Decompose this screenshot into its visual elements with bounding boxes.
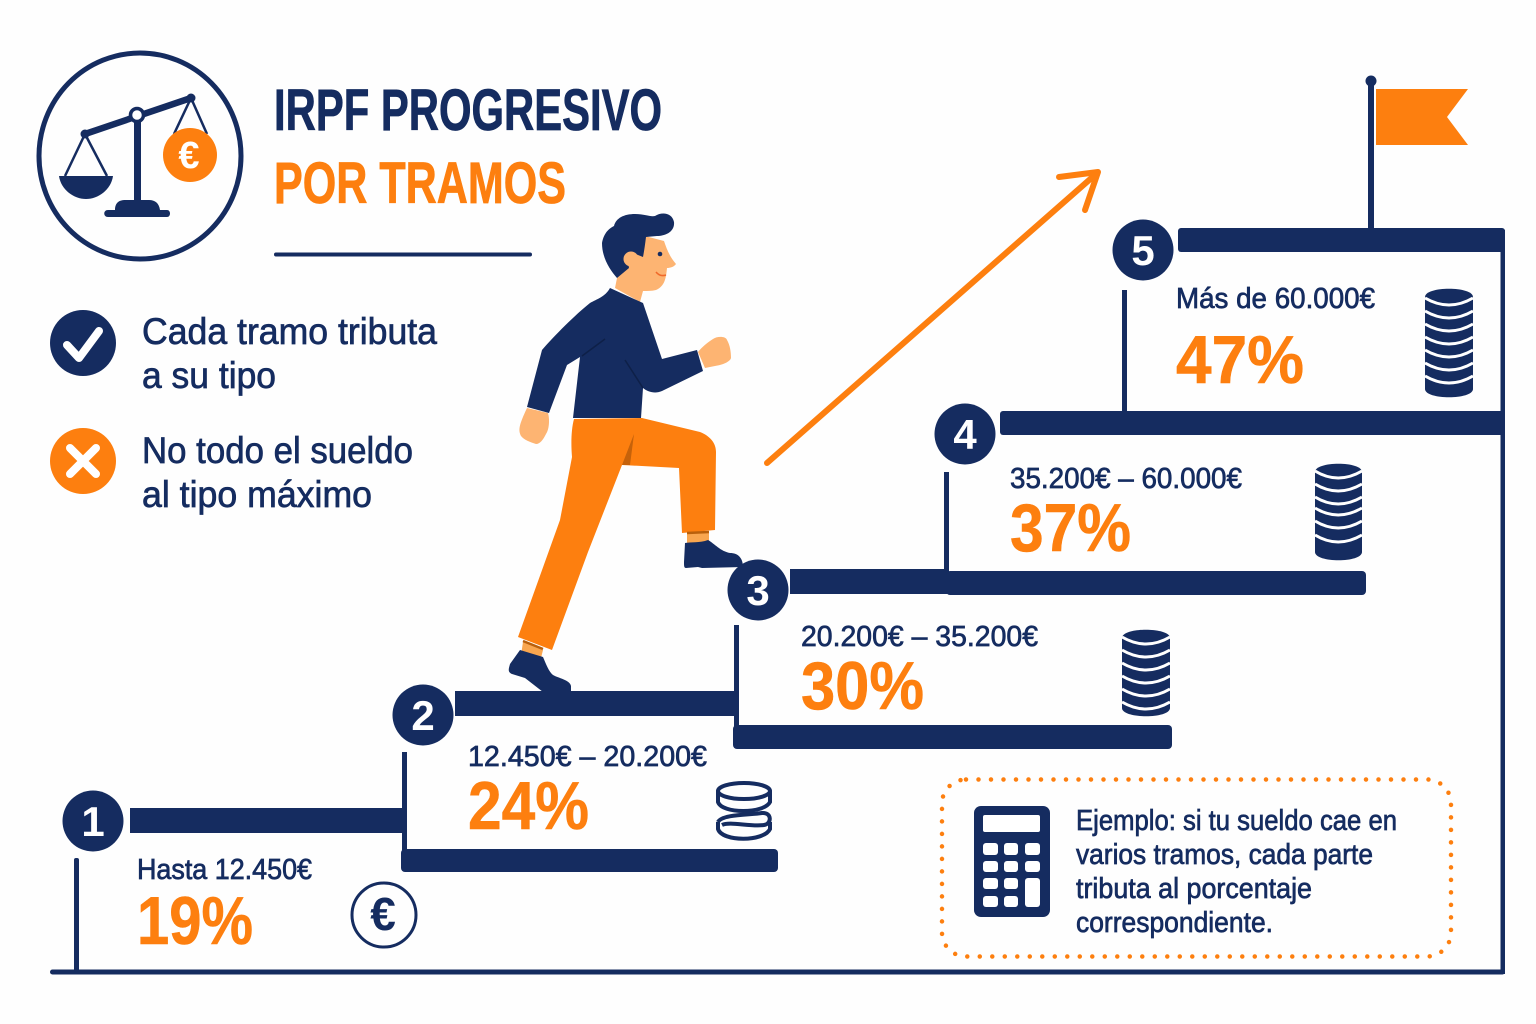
icon: coin stack	[1122, 630, 1170, 716]
step 1: 19%	[137, 883, 253, 959]
callout text	[1076, 805, 1397, 939]
bullet: not all salary at the top rate: No todo el sueldo	[142, 430, 413, 471]
eye and smile	[658, 252, 662, 256]
bullet: not all salary at the top rate	[50, 428, 413, 515]
arrow: upward progression	[767, 172, 1098, 463]
callout text: varios tramos, cada parte	[1076, 839, 1373, 871]
callout text: correspondiente.	[1076, 907, 1273, 939]
icon: coin stack	[1315, 464, 1362, 560]
back ankle	[521, 642, 543, 658]
step 2: 24%	[468, 768, 589, 844]
icon: goal flag	[1366, 76, 1468, 230]
bullet: each bracket taxed at its rate	[50, 310, 437, 396]
icon: coin stack	[1425, 289, 1473, 397]
step 5: 47%	[1176, 322, 1304, 398]
icon: scale with euro coin	[39, 53, 241, 259]
step 3: 3	[746, 567, 770, 614]
trousers	[518, 418, 716, 650]
front fist	[698, 337, 731, 368]
bullet: not all salary at the top rate: al tipo máximo	[142, 474, 372, 515]
icon: coin pair	[718, 783, 770, 839]
step 4: 37%	[1010, 490, 1131, 566]
step 2: 2	[411, 692, 435, 739]
step 3	[728, 560, 1170, 724]
hair	[602, 214, 674, 278]
step 1: Hasta 12.450€	[137, 854, 312, 886]
icon: euro coin	[352, 883, 416, 947]
step 3: 30%	[801, 648, 924, 724]
title divider	[274, 252, 532, 256]
staircase frame	[50, 228, 1505, 974]
front ankle	[687, 531, 709, 544]
step 2: 12.450€ – 20.200€	[468, 741, 707, 773]
title	[274, 78, 662, 216]
front shoe	[684, 540, 743, 568]
step 2	[392, 684, 770, 844]
callout: example	[942, 780, 1451, 956]
callout text: Ejemplo: si tu sueldo cae en	[1076, 805, 1397, 837]
icon: scale with euro coin: €	[178, 135, 200, 177]
step 1	[62, 790, 416, 959]
title: POR TRAMOS	[274, 151, 566, 216]
shirt	[527, 288, 703, 418]
neck and face	[615, 236, 676, 302]
figure: man climbing stairs	[509, 214, 743, 692]
ear	[624, 252, 638, 266]
step 1: 1	[81, 798, 105, 845]
step 5: 5	[1131, 227, 1155, 274]
icon: calculator	[974, 806, 1050, 917]
title: IRPF PROGRESIVO	[274, 78, 662, 143]
step 4: 4	[953, 411, 977, 458]
step 3: 20.200€ – 35.200€	[801, 621, 1038, 653]
bullet: each bracket taxed at its rate: a su tipo	[142, 355, 276, 396]
back hand	[519, 408, 549, 444]
step 4	[934, 404, 1362, 566]
callout text: tributa al porcentaje	[1076, 873, 1312, 905]
icon: euro coin: €	[370, 888, 396, 940]
step 4: 35.200€ – 60.000€	[1010, 463, 1242, 495]
back shoe	[509, 650, 571, 692]
step 5	[1112, 220, 1473, 398]
step 5: Más de 60.000€	[1176, 283, 1375, 315]
bullet: each bracket taxed at its rate: Cada tramo tributa	[142, 311, 437, 352]
